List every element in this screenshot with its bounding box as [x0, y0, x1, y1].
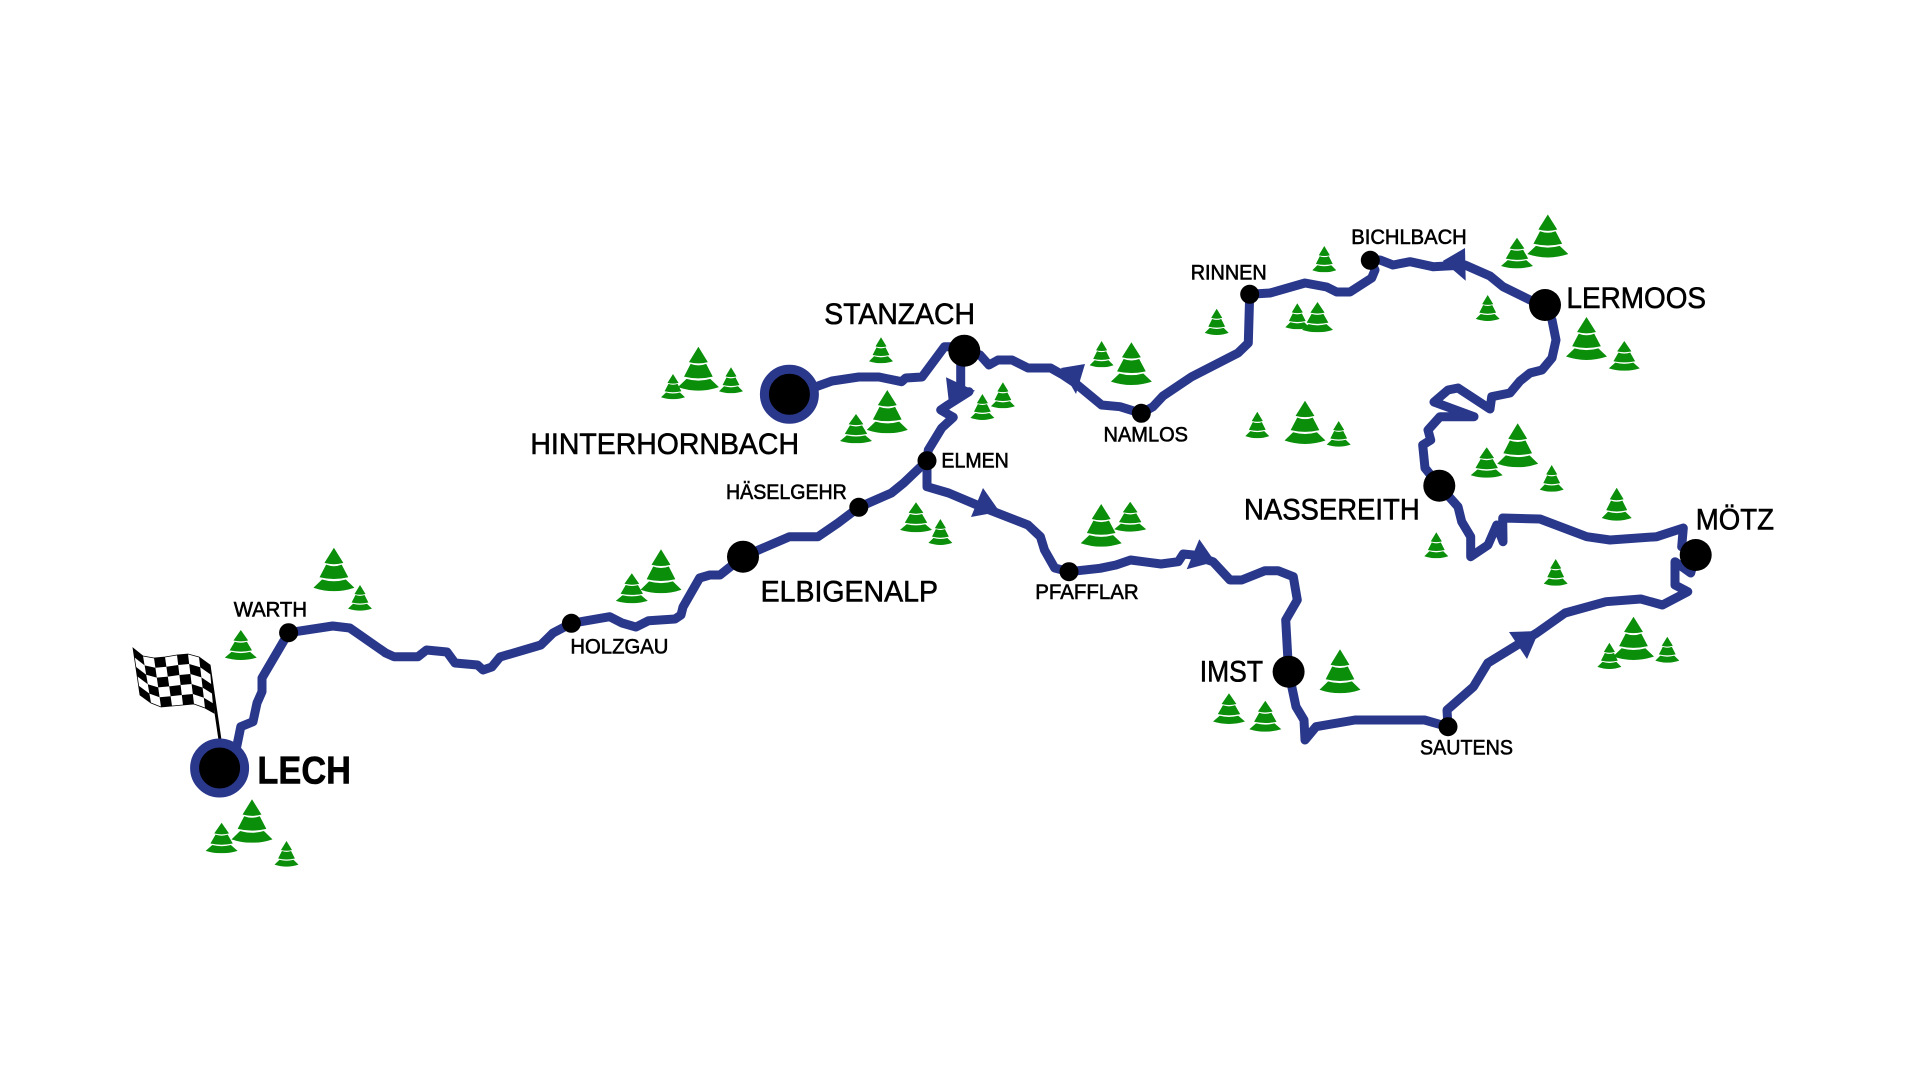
arrow: towards Pfafflar	[971, 488, 1000, 517]
stop: Elbigenalp	[727, 541, 759, 573]
stop: Nassereith	[1423, 470, 1455, 502]
stop: Namlos	[1132, 404, 1151, 423]
stop: Häselgehr	[849, 498, 868, 517]
label: Hinterhornbach: HINTERHORNBACH	[530, 428, 799, 461]
arrow: towards Imst	[1187, 539, 1215, 569]
route line	[237, 260, 1696, 747]
stop: Stanzach	[948, 335, 980, 367]
arrow: Stanzach descent	[946, 377, 975, 406]
place labels	[234, 225, 1774, 792]
label: Lech: LECH	[257, 749, 351, 792]
label: Rinnen: RINNEN	[1191, 261, 1267, 285]
stop: Rinnen	[1240, 285, 1259, 304]
label: Lermoos: LERMOOS	[1566, 282, 1706, 315]
stops	[195, 251, 1712, 793]
trees south of Elmen	[900, 502, 1146, 547]
trees near Holzgau	[616, 549, 682, 603]
stop: Lech	[195, 743, 245, 793]
route: Stanzach descent	[956, 351, 965, 388]
stop: Warth	[279, 623, 298, 642]
route: Lech to Stanzach via Elmen	[237, 392, 969, 747]
label: Stanzach: STANZACH	[824, 298, 975, 331]
trees near Mötz	[1544, 488, 1679, 669]
trees near Hinterhornbach	[661, 337, 893, 399]
arrow: towards Bichlbach	[1443, 248, 1466, 281]
route: Elmen to Sautens	[927, 461, 1448, 740]
trees east of Stanzach	[1090, 341, 1152, 385]
label: Namlos: NAMLOS	[1104, 422, 1188, 446]
stop: Imst	[1273, 656, 1305, 688]
trees below Stanzach	[840, 382, 1015, 443]
direction arrows	[946, 248, 1539, 659]
label: Warth: WARTH	[234, 597, 307, 621]
icon: checkered flag	[133, 648, 220, 740]
trees near Warth	[225, 548, 372, 660]
label: Pfafflar: PFAFFLAR	[1035, 580, 1139, 604]
route: Lermoos to Stanzach	[965, 260, 1545, 413]
label: Bichlbach: BICHLBACH	[1351, 225, 1467, 249]
flag cloth	[133, 648, 214, 713]
stop: Pfafflar	[1060, 562, 1078, 581]
label: Häselgehr: HÄSELGEHR	[726, 480, 847, 504]
route: Hinterhornbach to Stanzach	[816, 347, 965, 387]
trees near Imst	[1213, 649, 1360, 732]
label: Sautens: SAUTENS	[1420, 736, 1513, 760]
stop: Bichlbach	[1361, 251, 1380, 270]
stop: Holzgau	[562, 614, 581, 633]
route: Sautens to Mötz	[1447, 555, 1696, 727]
label: Nassereith: NASSEREITH	[1244, 494, 1420, 527]
stop: Elmen	[918, 451, 936, 470]
label: Imst: IMST	[1200, 656, 1263, 689]
label: Elbigenalp: ELBIGENALP	[761, 575, 938, 608]
stop: Hinterhornbach	[764, 369, 814, 419]
flag checks	[133, 648, 214, 713]
stop: Sautens	[1438, 717, 1458, 736]
label: Elmen: ELMEN	[941, 448, 1009, 472]
icon: trees	[206, 214, 1679, 867]
label: Mötz: MÖTZ	[1696, 504, 1774, 537]
label: Holzgau: HOLZGAU	[570, 634, 668, 658]
trees near Rinnen	[1205, 246, 1336, 335]
route: Nassereith to Lermoos	[1423, 305, 1556, 486]
trees near Lech	[206, 799, 298, 867]
stop: Mötz	[1680, 539, 1712, 571]
stop: Lermoos	[1529, 289, 1561, 321]
trees near Nassereith	[1424, 423, 1564, 558]
trees in the central valley	[1245, 401, 1351, 447]
flag pole	[209, 665, 220, 740]
arrow: towards Mötz	[1509, 631, 1539, 659]
route: Mötz to Nassereith	[1439, 486, 1696, 557]
trees near Lermoos	[1476, 214, 1640, 371]
arrow: towards Stanzach	[1061, 364, 1085, 394]
